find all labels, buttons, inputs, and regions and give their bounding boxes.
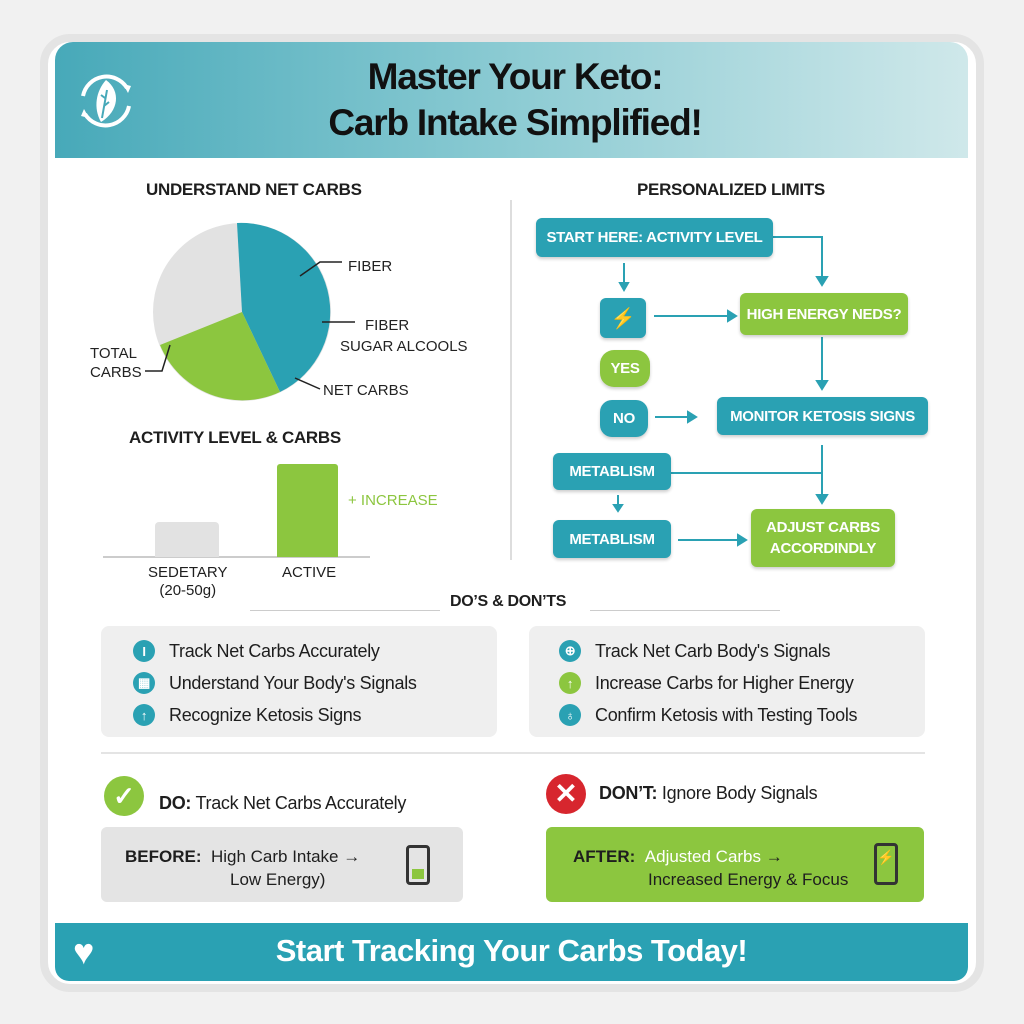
panel: do list: Understand Your Body's Signals	[169, 672, 417, 692]
bar chart: ACTIVE	[282, 564, 336, 581]
icon: bolt: ⚡	[611, 308, 635, 330]
before box: Low Energy)	[230, 870, 325, 889]
icon: charged battery	[874, 843, 898, 885]
icon: low battery	[406, 845, 430, 885]
pie chart: SUGAR ALCOOLS	[340, 338, 468, 355]
box: high energy	[740, 293, 908, 335]
divider	[510, 200, 512, 560]
after box	[546, 827, 924, 902]
panel: tips list	[529, 626, 925, 737]
panel: do list: Recognize Ketosis Signs	[169, 704, 361, 724]
box: adjust: ADJUST CARBS	[766, 519, 880, 536]
pie chart: TOTAL	[90, 345, 137, 362]
icon: charged battery: ⚡	[877, 849, 895, 865]
box: metablism 1	[553, 453, 671, 490]
panel: tips list: Confirm Ketosis with Testing Tools	[595, 704, 857, 724]
before box	[101, 827, 463, 902]
title: Master Your Keto:	[368, 56, 662, 97]
box: start here: START HERE: ACTIVITY LEVEL	[546, 229, 763, 246]
panel: do list: I	[142, 644, 146, 658]
bar chart: SEDETARY	[148, 564, 227, 581]
panel: do list	[101, 626, 497, 737]
panel: tips list: Increase Carbs for Higher Energy	[595, 672, 854, 692]
icon: leaf cycle	[81, 74, 131, 128]
title	[328, 56, 702, 143]
heading: understand net carbs: UNDERSTAND NET CARBS	[146, 180, 362, 199]
panel: do list: Track Net Carbs Accurately	[169, 640, 380, 660]
footer banner	[55, 923, 968, 981]
box: monitor: MONITOR KETOSIS SIGNS	[730, 408, 915, 424]
don't statement: DON’T: Ignore Body Signals	[599, 783, 817, 803]
pie chart: FIBER	[365, 317, 409, 334]
bar chart: (20-50g)	[159, 582, 216, 599]
box: adjust	[751, 509, 895, 567]
box: high energy: HIGH ENERGY NEDS?	[747, 306, 901, 322]
bar chart: + INCREASE	[348, 492, 438, 509]
pie chart: CARBS	[90, 364, 142, 381]
panel: tips list: ♁	[565, 708, 575, 722]
box: start here	[536, 218, 773, 257]
box: yes	[600, 350, 650, 387]
box: metablism 2: METABLISM	[569, 530, 655, 548]
panel: tips list: Track Net Carb Body's Signals	[595, 640, 830, 660]
box: metablism 1: METABLISM	[569, 463, 655, 480]
heading: personalized limits: PERSONALIZED LIMITS	[637, 180, 825, 199]
flowchart	[534, 218, 930, 570]
pie chart: NET CARBS	[323, 382, 409, 399]
after box: AFTER: Adjusted Carbs →	[573, 847, 783, 866]
do statement	[104, 776, 406, 816]
box: metablism 2	[553, 520, 671, 558]
before box: BEFORE: High Carb Intake →	[125, 847, 360, 866]
header banner	[55, 42, 968, 158]
pie chart	[90, 222, 468, 401]
box: monitor	[717, 397, 928, 435]
do statement: DO: Track Net Carbs Accurately	[159, 793, 406, 813]
heading: activity level & carbs: ACTIVITY LEVEL & CARBS	[129, 428, 341, 447]
don't statement	[546, 774, 817, 814]
box: no	[600, 400, 648, 437]
panel: tips list: ⊕	[565, 643, 575, 658]
bar chart	[103, 464, 438, 599]
don't statement: ✕	[554, 778, 578, 809]
box: adjust: ACCORDINDLY	[770, 540, 876, 557]
call to action: Start Tracking Your Carbs Today!	[276, 933, 747, 968]
box: no: NO	[613, 410, 635, 427]
box: yes: YES	[610, 360, 640, 377]
panel: do list: ▦	[138, 675, 150, 690]
panel: tips list: ↑	[567, 676, 573, 690]
icon: bolt	[600, 298, 646, 338]
pie chart: FIBER	[348, 258, 392, 275]
after box: Increased Energy & Focus	[648, 870, 848, 889]
title: Carb Intake Simplified!	[328, 102, 702, 143]
do statement: ✓	[113, 781, 135, 811]
panel: do list: ↑	[141, 708, 147, 722]
heading: do's & don'ts: DO’S & DON’TS	[450, 593, 566, 610]
icon: heart leaf: ♥	[73, 931, 94, 972]
